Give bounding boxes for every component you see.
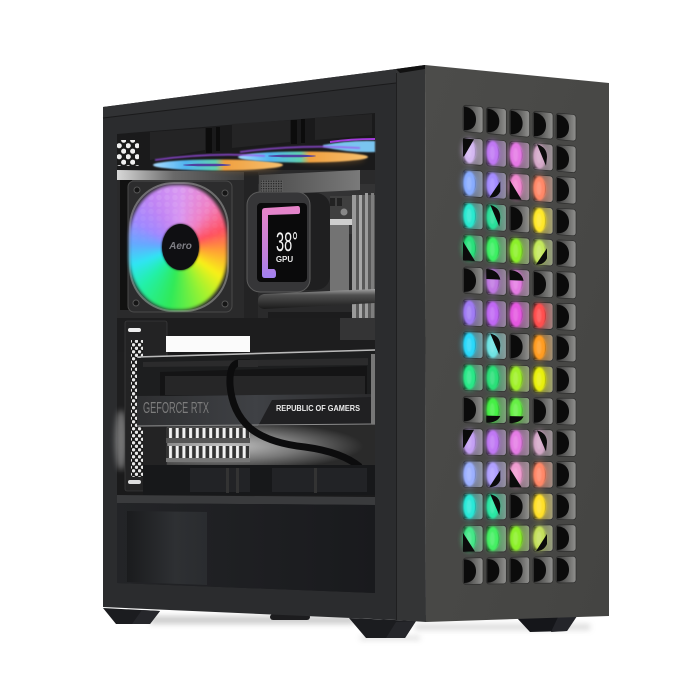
rear fan frame (128, 181, 232, 312)
liquid cooler tube (258, 289, 375, 309)
sensor label: GPU (276, 255, 293, 264)
hole row 12 (462, 461, 576, 488)
GPU model name: GEFORCE RTX (143, 400, 209, 417)
motherboard bracket (259, 170, 360, 195)
expansion slot covers (166, 428, 250, 462)
lower back wall (117, 318, 375, 352)
hole row 8 (462, 331, 576, 362)
pump head (247, 192, 330, 292)
shroud shelf (117, 495, 375, 505)
hole row 13 (462, 493, 576, 520)
hole row 7 (462, 299, 576, 330)
front edge strip (396, 65, 426, 622)
top fan light rings (153, 139, 375, 172)
hole row 11 (462, 429, 576, 457)
hole row 9 (462, 364, 576, 394)
screen bracket (262, 206, 300, 278)
hole row 10 (463, 396, 576, 425)
upper back wall (117, 170, 375, 325)
ventilation holes with RGB fans behind (462, 105, 576, 584)
top fan struts (150, 114, 372, 160)
rear RGB fan: Aero (169, 241, 192, 252)
hole row 2 (462, 137, 576, 173)
hole row 3 (462, 170, 576, 204)
hole row 5 (462, 234, 576, 267)
side panel frame (103, 69, 396, 620)
right mesh panel (425, 65, 609, 622)
top mesh vent (117, 140, 139, 166)
brand plate (258, 397, 372, 426)
white GPU backplate (166, 336, 250, 352)
ground shadow (150, 616, 590, 640)
PSU window (127, 511, 207, 585)
case feet (103, 608, 577, 638)
hole row 6 (463, 267, 576, 299)
window interior (115, 113, 375, 593)
radiator fins (352, 193, 375, 340)
small board parts (330, 196, 352, 291)
rear RGB fan (126, 182, 230, 312)
PSU shroud (117, 503, 375, 593)
PCIe bracket column (125, 321, 167, 491)
pump base and lower wall (268, 312, 352, 342)
brand plate: REPUBLIC OF GAMERS (276, 403, 360, 413)
hole row 15 (463, 556, 576, 584)
temperature reading: 38° (276, 227, 298, 257)
bottom fans (143, 465, 375, 495)
hole row 14 (462, 525, 576, 552)
hole row 1 (463, 105, 576, 141)
GPU power cable (230, 360, 360, 467)
graphics card (137, 350, 375, 427)
hole row 4 (462, 202, 576, 236)
